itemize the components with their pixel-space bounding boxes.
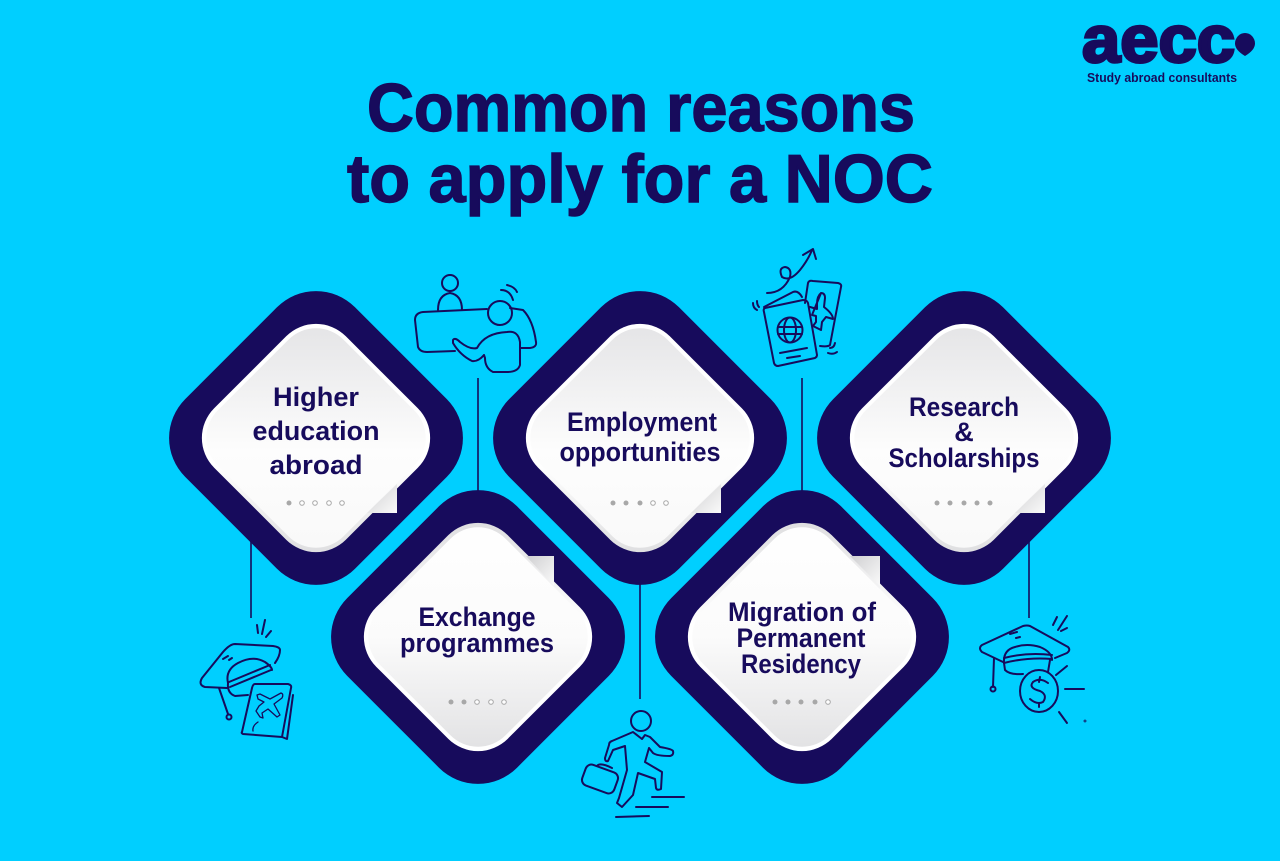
label — [560, 407, 720, 467]
page curl — [1015, 484, 1045, 513]
label — [400, 602, 554, 658]
label: Employment — [567, 407, 717, 437]
panel: higher education abroad — [146, 268, 486, 608]
title: to apply for a NOC — [347, 141, 933, 217]
label — [728, 597, 877, 679]
icon: graduation cap with passport — [201, 620, 293, 739]
page curl — [367, 484, 397, 513]
label — [252, 382, 380, 480]
icon: graduation cap with dollar coin — [980, 616, 1085, 723]
label: Residency — [741, 649, 861, 679]
panel: employment opportunities — [470, 268, 810, 608]
progress dots — [934, 500, 992, 506]
label: abroad — [270, 450, 362, 480]
logo: aecc study abroad consultants: Study abroad consultants — [1087, 71, 1237, 85]
label: opportunities — [560, 437, 720, 467]
progress dots — [610, 500, 668, 506]
connector: passport icon to migration — [801, 378, 803, 491]
label: Migration of — [728, 597, 877, 627]
label — [888, 392, 1040, 473]
progress dots — [772, 700, 830, 704]
panel: migration of permanent residency — [632, 467, 972, 807]
page curl — [850, 556, 880, 586]
label: Research — [909, 392, 1019, 422]
panel: research and scholarships — [794, 268, 1134, 608]
label: Higher — [273, 382, 359, 412]
page curl — [691, 484, 721, 513]
icon: reception desk — [415, 275, 536, 372]
icon: running businessperson — [580, 711, 684, 817]
label: & — [954, 417, 974, 447]
label: Scholarships — [888, 443, 1040, 473]
progress dots — [448, 700, 506, 704]
connector: higher education to cap icon — [250, 535, 252, 618]
label: Permanent — [736, 623, 866, 653]
icon: passport and boarding pass — [753, 249, 841, 366]
connector: employment to runner icon — [639, 584, 641, 699]
connector: reception icon to exchange — [477, 378, 479, 491]
page curl — [526, 556, 554, 586]
logo: aecc study abroad consultants: aecc — [1082, 2, 1235, 76]
title — [347, 70, 933, 217]
label: programmes — [400, 628, 554, 658]
connector: research to money cap icon — [1028, 537, 1030, 618]
label: Exchange — [418, 602, 536, 632]
progress dots — [286, 500, 344, 506]
panel: exchange programmes — [308, 467, 648, 807]
title: Common reasons — [367, 70, 915, 146]
label: education — [252, 416, 380, 446]
